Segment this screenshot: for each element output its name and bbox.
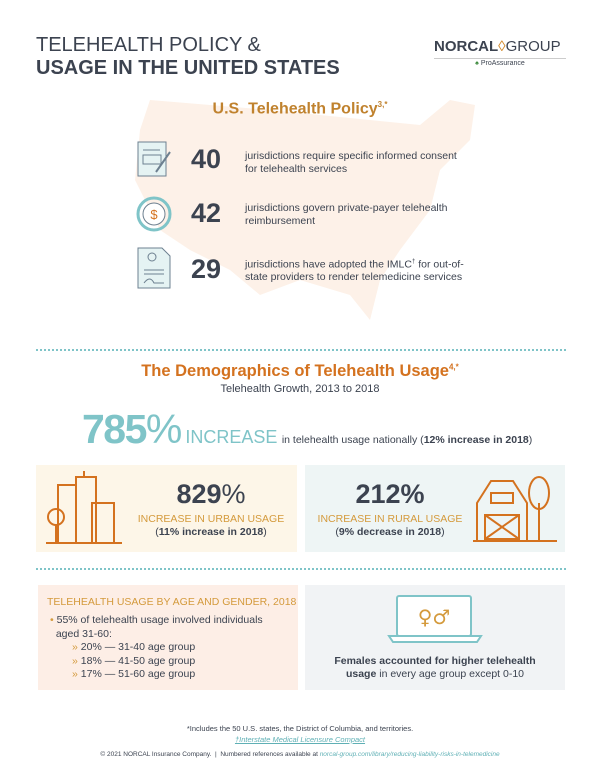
logo: NORCAL◊GROUP — [434, 38, 561, 55]
panel: age and gender: TELEHEALTH USAGE BY AGE AND GENDER, 2018 — [47, 596, 296, 608]
footnotes: †Interstate Medical Licensure Compact — [235, 735, 365, 744]
icon: dollar cycle — [136, 196, 172, 232]
panel: urban: (11% increase in 2018) — [155, 526, 267, 538]
row 2 — [136, 196, 448, 232]
subtitle: Telehealth Growth, 2013 to 2018 — [220, 383, 380, 395]
heading: US telehealth policy: U.S. Telehealth Policy3,* — [213, 100, 387, 117]
row 2: jurisdictions govern private-payer telehealth — [245, 202, 448, 214]
stat: 785%: 785% INCREASE in telehealth usage nationally (12% increase in 2018) — [82, 406, 532, 452]
panel: age and gender — [38, 585, 298, 690]
row 3: 29 — [191, 254, 221, 284]
background map — [135, 100, 475, 320]
panel: urban — [36, 465, 297, 552]
panel: rural — [305, 465, 565, 552]
panel: rural: (9% decrease in 2018) — [335, 526, 445, 538]
row 1: jurisdictions require specific informed consent — [245, 150, 457, 162]
panel: age and gender: » 20% — 31-40 age group — [72, 641, 195, 653]
panel: urban: INCREASE IN URBAN USAGE — [138, 513, 284, 525]
icon: barn — [473, 476, 557, 542]
panel: rural: INCREASE IN RURAL USAGE — [318, 513, 462, 525]
footnotes — [187, 724, 413, 744]
row 2: 42 — [191, 198, 221, 228]
row 1: for telehealth services — [245, 162, 347, 174]
panel: age and gender: » 18% — 41-50 age group — [72, 655, 195, 667]
icon: laptop: ♀♂ — [418, 605, 450, 629]
logo — [434, 38, 566, 67]
row 1: 40 — [191, 144, 221, 174]
panel: age and gender: • 55% of telehealth usage involved individuals — [50, 614, 263, 626]
panel: age and gender: aged 31-60: — [56, 628, 112, 640]
title: USAGE IN THE UNITED STATES — [36, 57, 340, 79]
row 3: state providers to render telemedicine services — [245, 271, 462, 283]
panel: rural: 212% — [355, 479, 425, 509]
icon: document pen — [138, 142, 171, 176]
footnotes: *Includes the 50 U.S. states, the District of Columbia, and territories. — [187, 724, 413, 733]
panel: urban: 829% — [176, 479, 246, 509]
row 1 — [138, 142, 457, 176]
panel: age and gender: » 17% — 51-60 age group — [72, 668, 195, 680]
logo: ♠ ProAssurance — [475, 60, 525, 67]
icon: laptop — [387, 595, 483, 643]
panel: gender: Females accounted for higher telehealth — [334, 655, 536, 667]
icon: city — [46, 471, 122, 544]
heading: demographics: The Demographics of Telehealth Usage4,* — [141, 362, 459, 380]
title: TELEHEALTH POLICY & — [36, 34, 261, 56]
row 3 — [138, 248, 464, 288]
row 3: jurisdictions have adopted the IMLC† for out-of- — [245, 258, 464, 270]
icon: certificate — [138, 248, 170, 288]
row 2: reimbursement — [245, 214, 315, 226]
copyright: © 2021 NORCAL Insurance Company. | Numbered references available at norcal-group.com/library/reducing-liability-risks-in-telemedicine — [100, 751, 500, 758]
icon: dollar cycle: $ — [150, 207, 158, 222]
title — [36, 34, 340, 79]
panel: gender: usage in every age group except 0-10 — [346, 668, 524, 680]
panel: gender — [305, 585, 565, 690]
